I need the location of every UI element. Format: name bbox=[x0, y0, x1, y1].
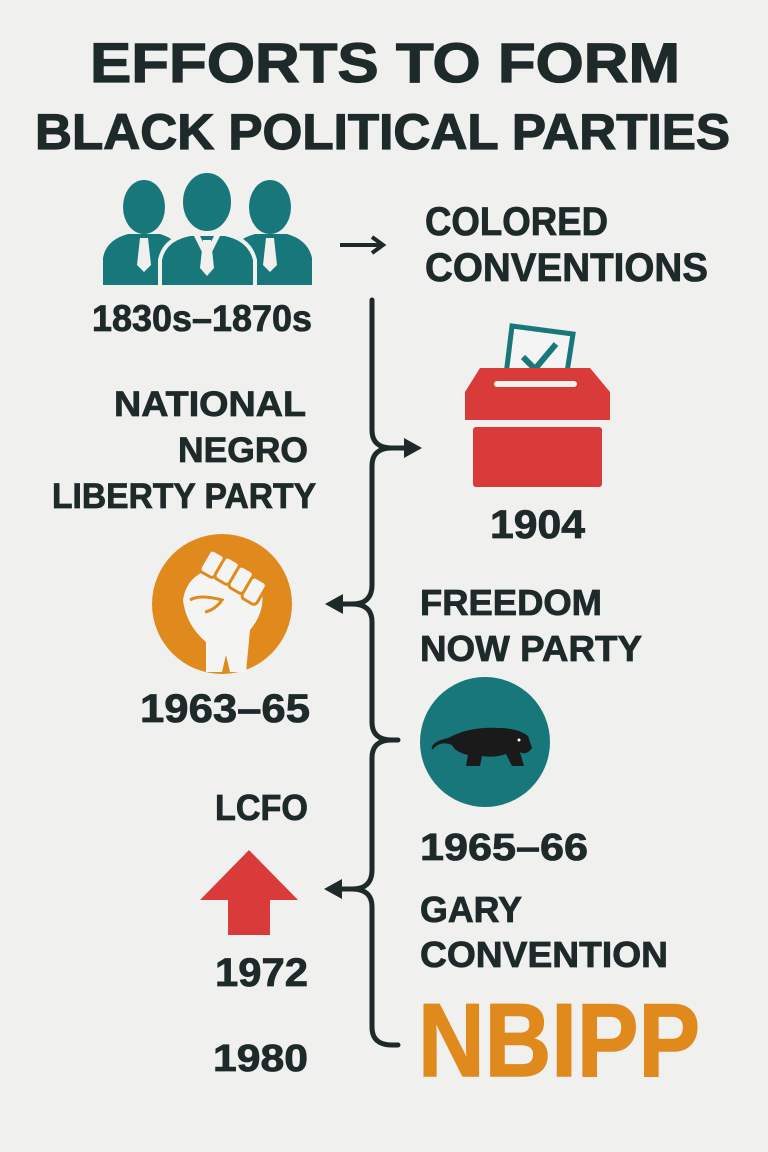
timeline braces bbox=[335, 300, 410, 1045]
text: colored conventions bbox=[425, 200, 708, 290]
text: gary convention: GARY bbox=[420, 889, 522, 930]
date: 1980: 1980 bbox=[213, 1038, 308, 1080]
arrowheads bbox=[324, 438, 422, 899]
icon: raised fist bbox=[152, 534, 292, 674]
icon: red up arrow bbox=[200, 850, 298, 935]
text: national negro liberty party: NATIONAL bbox=[114, 385, 306, 424]
text: freedom now party bbox=[420, 582, 642, 669]
date: 1904: 1904 bbox=[490, 503, 586, 547]
text: national negro liberty party: LIBERTY PARTY bbox=[52, 477, 316, 516]
text: national negro liberty party: NEGRO bbox=[178, 431, 308, 470]
icon: three people bbox=[103, 171, 312, 287]
text: colored conventions: CONVENTIONS bbox=[425, 246, 708, 290]
date: 1965-66: 1965–66 bbox=[420, 827, 588, 869]
date: 1963-65: 1963–65 bbox=[140, 687, 310, 731]
title bbox=[35, 31, 730, 160]
text: freedom now party: FREEDOM bbox=[420, 582, 602, 623]
text: freedom now party: NOW PARTY bbox=[420, 628, 642, 669]
text: gary convention: CONVENTION bbox=[420, 934, 668, 975]
text: colored conventions: COLORED bbox=[425, 200, 608, 244]
text: lcfo: LCFO bbox=[215, 787, 308, 828]
arrow: to colored conventions bbox=[340, 237, 383, 253]
text: NBIPP: NBIPP bbox=[418, 983, 700, 1099]
date: 1972: 1972 bbox=[215, 951, 308, 995]
icon: ballot box bbox=[465, 326, 610, 487]
title: BLACK POLITICAL PARTIES bbox=[35, 104, 730, 160]
icon: panther bbox=[420, 677, 550, 807]
date: 1830s-1870s: 1830s–1870s bbox=[92, 298, 312, 339]
text: national negro liberty party bbox=[52, 385, 316, 516]
title: EFFORTS TO FORM bbox=[90, 31, 680, 94]
text: gary convention bbox=[420, 889, 668, 975]
